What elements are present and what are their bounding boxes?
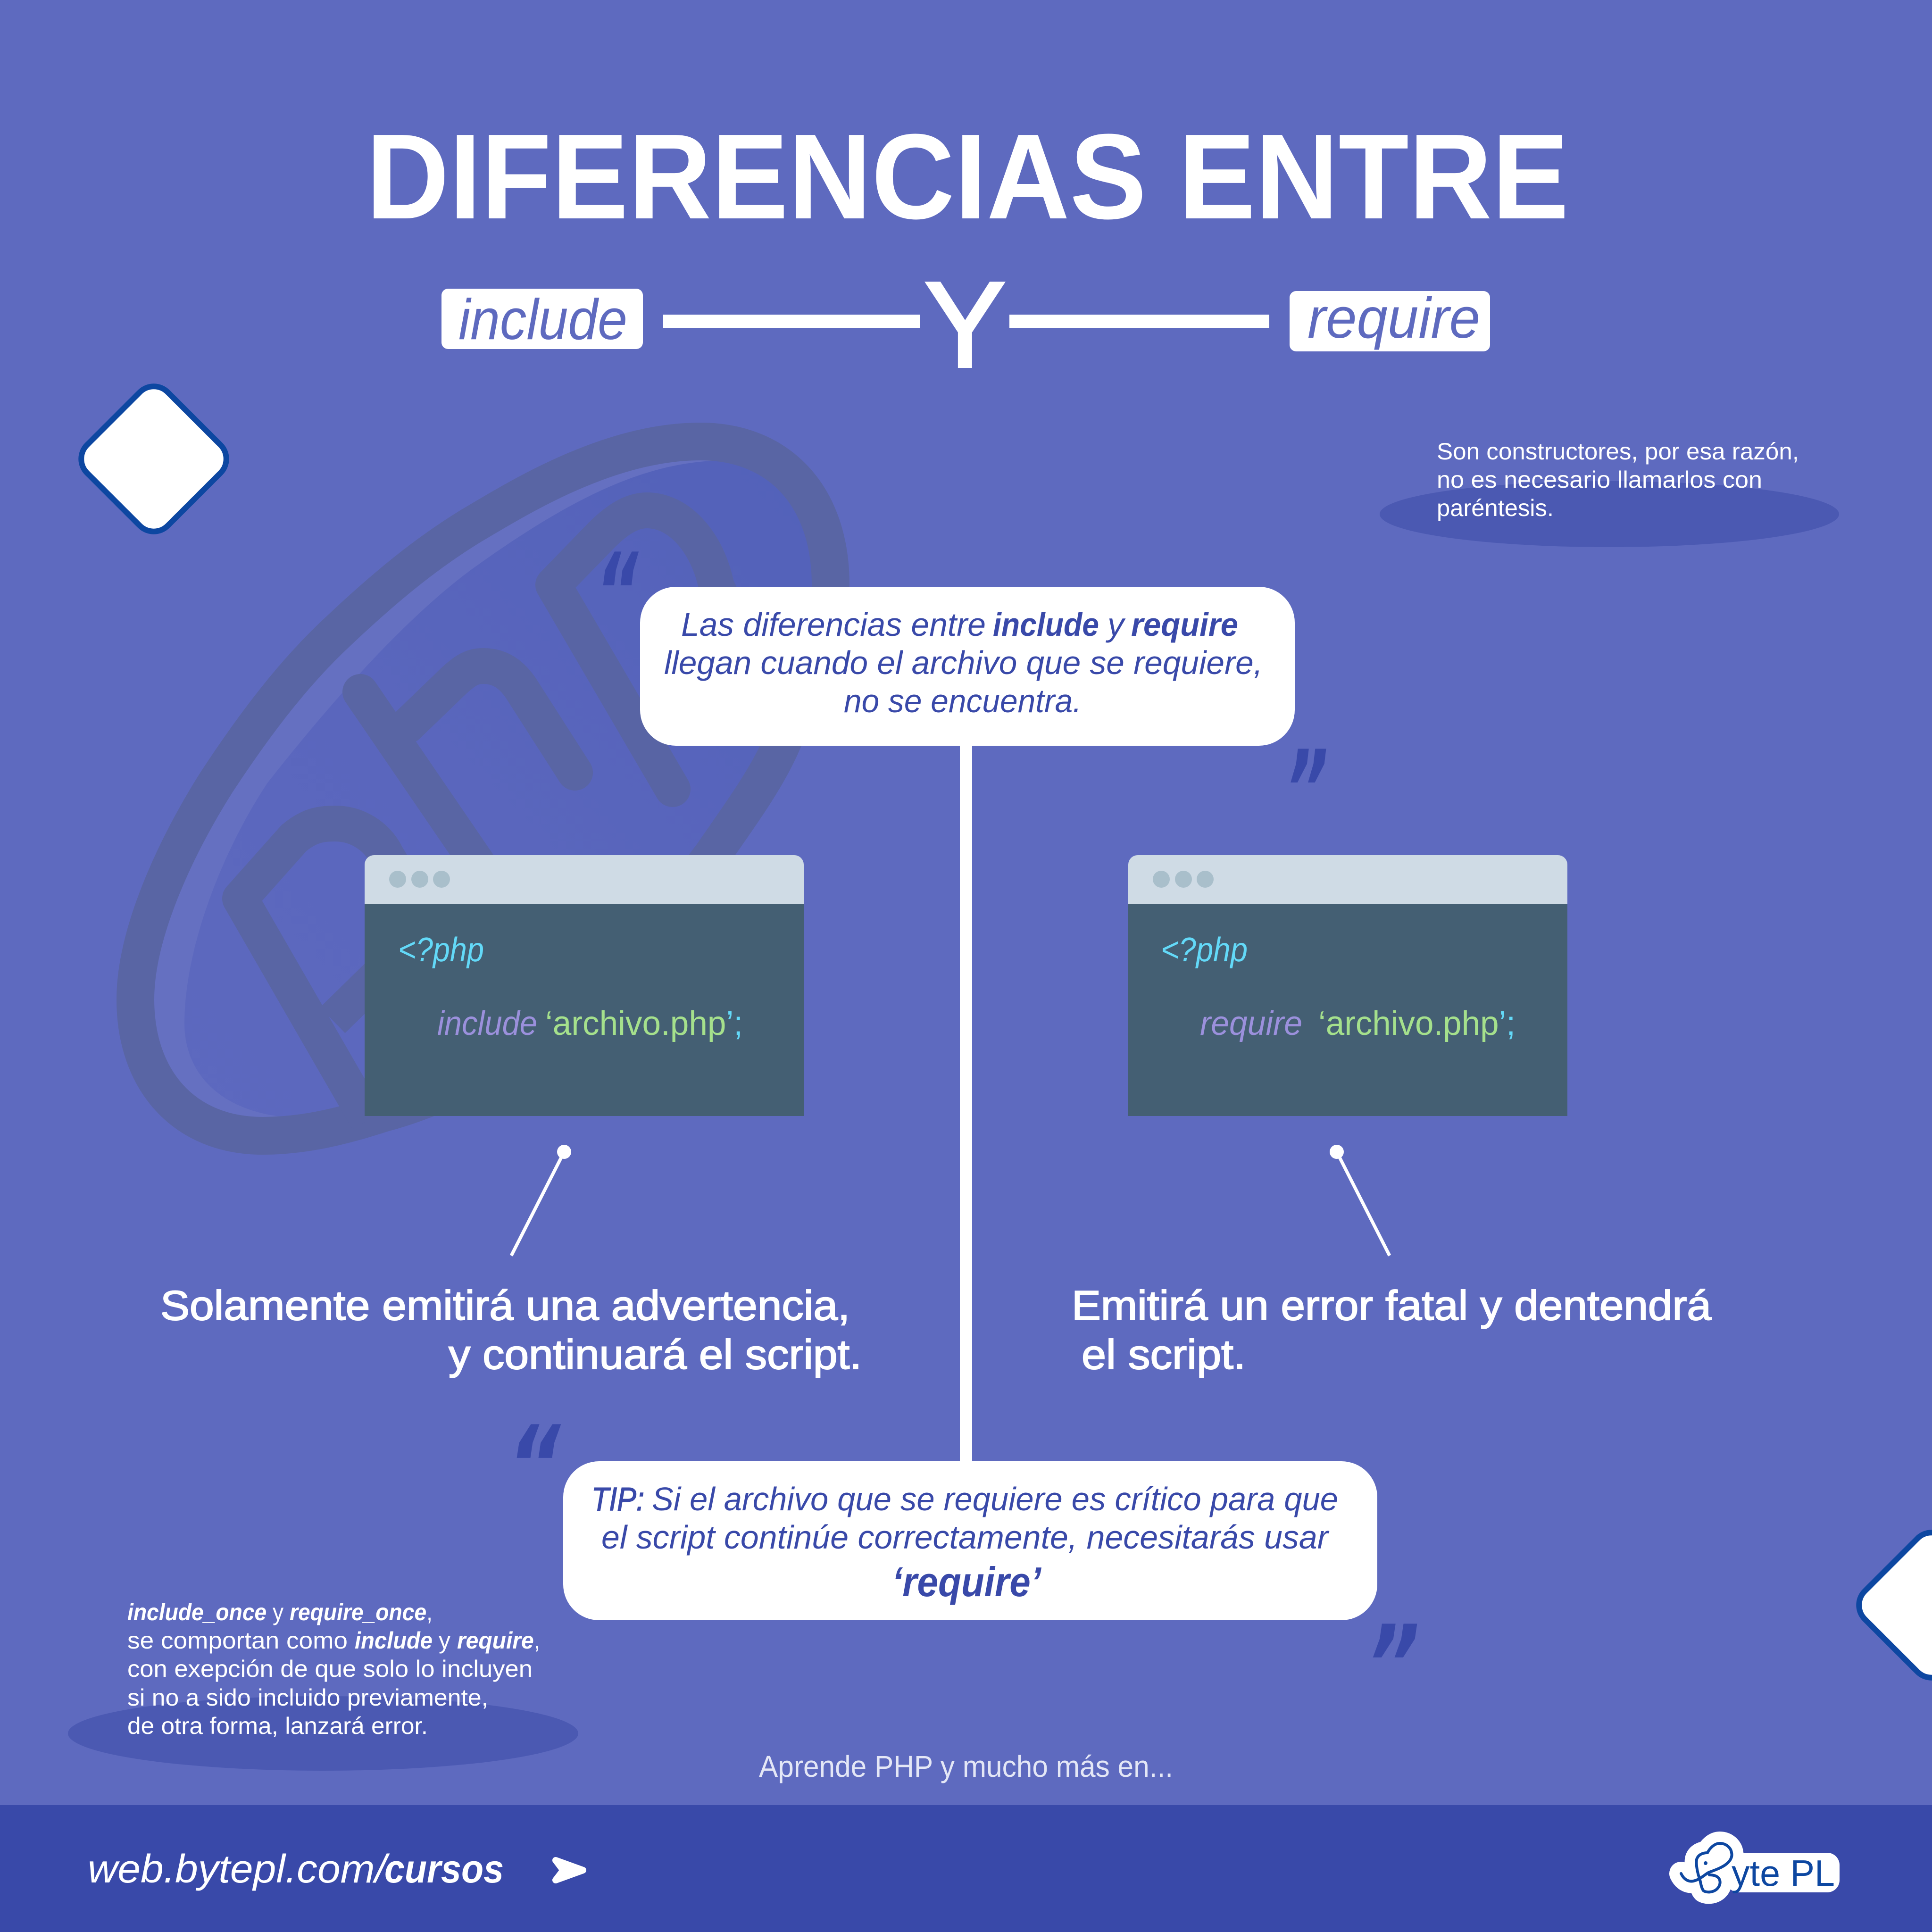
code window: require: ‘archivo.php’; [1318, 1005, 1516, 1042]
code window: include: include [437, 1005, 537, 1042]
text: require behaviour [1072, 1282, 1711, 1378]
call to action text: Aprende PHP y mucho más en... [759, 1749, 1173, 1783]
logo: Byte PL: yte PL [1732, 1852, 1835, 1894]
watermark: PHP logo [135, 441, 849, 1136]
code window: require: require [1200, 1005, 1302, 1042]
code window: require [1128, 855, 1567, 1116]
note: include_once: de otra forma, lanzará error. [127, 1713, 428, 1739]
callout: tip: ‘require’ [892, 1558, 1041, 1605]
quote mark open top: “ [596, 531, 639, 657]
callout: differences: llegan cuando el archivo que se requiere, [664, 644, 1263, 681]
pointer right [1330, 1145, 1390, 1256]
tag: require: require [1307, 286, 1480, 350]
quote mark close top: ” [1286, 728, 1328, 854]
callout: tip: Si el archivo que se requiere es crítico para que [652, 1481, 1338, 1517]
code window: include: ‘archivo.php’; [545, 1005, 743, 1042]
callout: differences: y [1106, 606, 1126, 643]
title: DIFERENCIAS ENTRE [366, 109, 1569, 244]
note: constructores [1380, 438, 1839, 547]
note: include_once: require, [457, 1627, 540, 1654]
callout: differences: include [993, 606, 1099, 643]
quote mark open bottom: “ [508, 1403, 561, 1529]
text: include behaviour: Solamente emitirá una advertencia, [160, 1282, 850, 1329]
callout: differences [640, 587, 1295, 746]
note: include_once: y [439, 1627, 450, 1654]
logo: Byte PL [1681, 1843, 1840, 1894]
note: include_once: se comportan como [127, 1627, 348, 1654]
decorative diamond right [1851, 1524, 1932, 1686]
footer link [88, 1847, 504, 1891]
code window: include [365, 855, 804, 1116]
pointer left [511, 1145, 571, 1256]
tag: include: include [458, 287, 627, 351]
callout: tip [563, 1461, 1377, 1620]
note: include_once: include [355, 1627, 433, 1654]
text: require behaviour: el script. [1082, 1331, 1246, 1378]
code window: require: <?php [1161, 931, 1248, 969]
text: include behaviour [160, 1282, 862, 1378]
subtitle row: include Y require [441, 257, 1490, 392]
note: include_once: con exepción de que solo lo incluyen [127, 1656, 533, 1682]
note: include_once [68, 1599, 578, 1771]
note: include_once: include_once y require_once, [127, 1599, 433, 1625]
note: constructores: no es necesario llamarlos con [1437, 466, 1762, 493]
connector line right [1009, 315, 1269, 328]
callout: differences: no se encuentra. [844, 683, 1082, 719]
vertical divider [960, 743, 972, 1465]
note: constructores: paréntesis. [1437, 495, 1554, 521]
decorative diamond left [73, 378, 234, 540]
quote mark close bottom: ” [1367, 1603, 1420, 1729]
note: include_once: si no a sido incluido previamente, [127, 1684, 488, 1711]
text: require behaviour: Emitirá un error fatal y dentendrá [1072, 1282, 1711, 1329]
connector line left [663, 315, 920, 328]
callout: tip: el script continúe correctamente, necesitarás usar [601, 1519, 1330, 1556]
footer link: cursos [384, 1847, 504, 1891]
letter Y: Y [924, 257, 1006, 392]
icon: arrow [556, 1860, 583, 1880]
callout: differences: Las diferencias entre [681, 606, 986, 643]
footer link: web.bytepl.com/ [88, 1847, 390, 1891]
note: constructores: Son constructores, por esa razón, [1437, 438, 1799, 465]
callout: differences: require [1131, 606, 1238, 643]
footer band [0, 1805, 1932, 1932]
callout: tip: TIP: [591, 1481, 644, 1517]
text: include behaviour: y continuará el script. [449, 1331, 862, 1378]
code window: include: <?php [398, 931, 484, 969]
